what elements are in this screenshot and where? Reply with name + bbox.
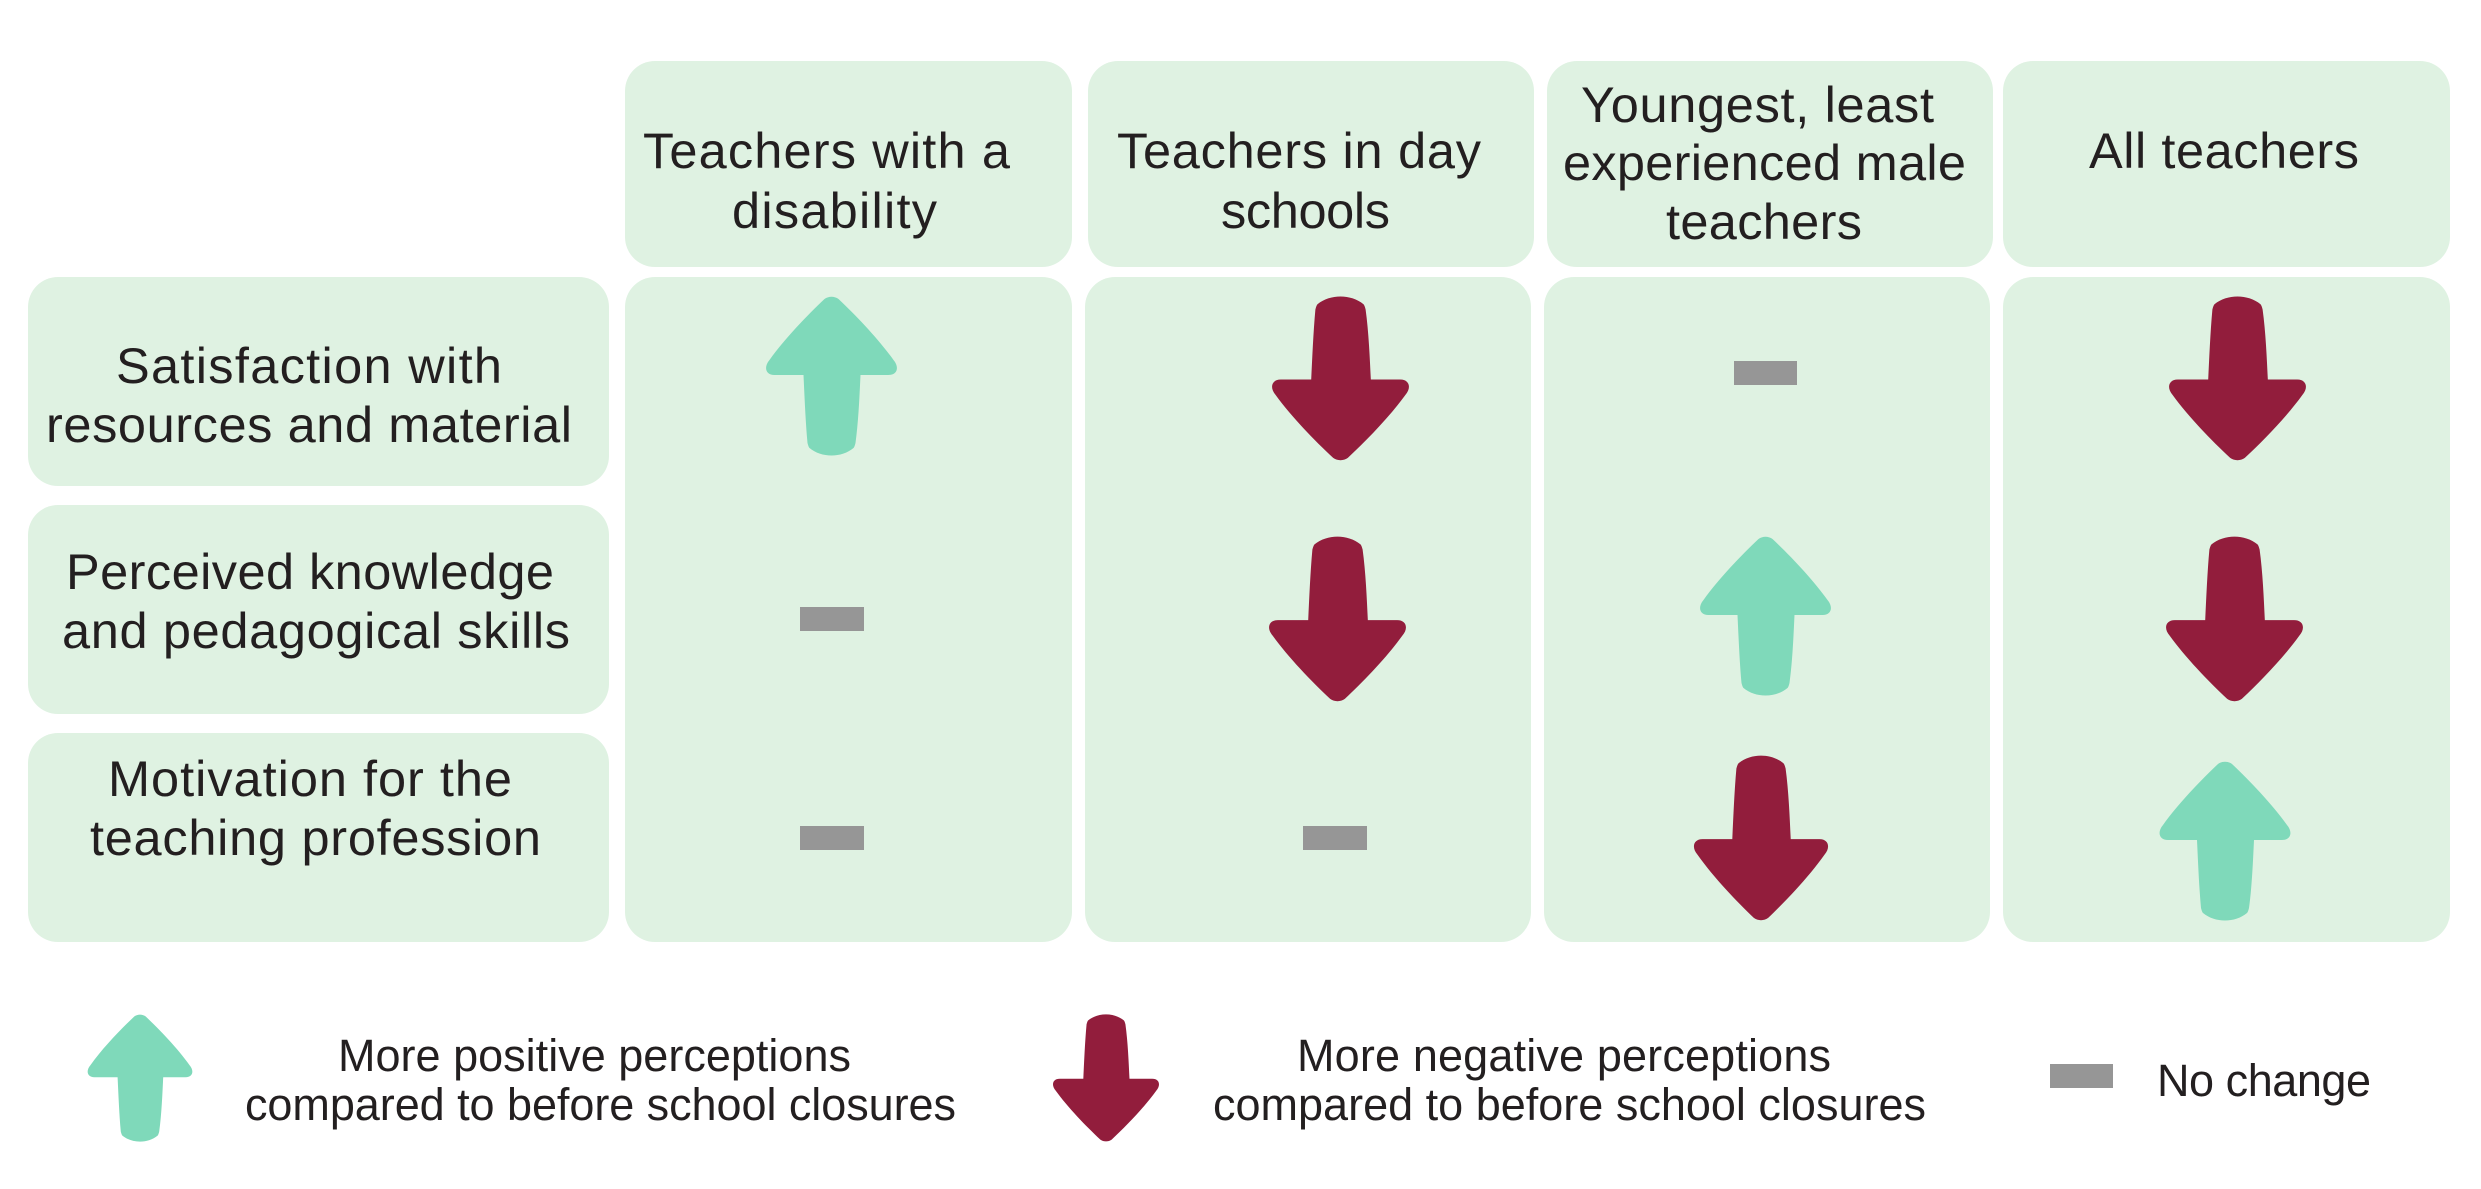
icon: up arrow, satisfaction [766, 297, 897, 456]
column header: teachers in day schools: Teachers in day [1117, 122, 1482, 179]
column header: youngest, least experienced male teachers [1547, 61, 1993, 267]
icon: no change dash, knowledge [800, 607, 864, 631]
icon: up arrow, knowledge [1700, 537, 1831, 696]
legend text: negative [1213, 1030, 1926, 1130]
icon: legend no change dash [2050, 1064, 2113, 1088]
legend text: positive: More positive perceptions [338, 1030, 851, 1081]
icon: down arrow, satisfaction [1272, 297, 1409, 460]
panel: teachers with a disability results [625, 277, 1072, 942]
icon: up arrow, motivation [2160, 762, 2290, 920]
column header: youngest, least experienced male teachers: Youngest, least [1581, 76, 1934, 133]
legend: more positive perceptions [88, 1015, 956, 1142]
column header: teachers in day schools [1088, 61, 1534, 267]
row label: perceived knowledge and pedagogical skills: and pedagogical skills [62, 602, 570, 659]
panel: teachers in day schools results [1085, 277, 1531, 942]
column header: teachers with a disability [625, 61, 1072, 267]
row label: satisfaction with resources and material: Satisfaction with [116, 337, 502, 394]
row label: motivation for the teaching profession: teaching profession [90, 809, 541, 866]
row label: satisfaction with resources and material [28, 277, 609, 486]
column header: all teachers: All teachers [2089, 122, 2359, 179]
legend text: no change: No change [2157, 1055, 2371, 1106]
row label: perceived knowledge and pedagogical skills [28, 505, 609, 714]
icon: down arrow, motivation [1694, 756, 1828, 920]
legend text: positive [245, 1030, 956, 1130]
legend: no change [2050, 1055, 2371, 1106]
panel: all teachers results [2003, 277, 2450, 942]
row label: motivation for the teaching profession: Motivation for the [108, 750, 512, 807]
legend text: negative: More negative perceptions [1297, 1030, 1831, 1081]
icon: legend down arrow [1053, 1014, 1159, 1141]
legend text: negative: compared to before school closures [1213, 1079, 1926, 1130]
icon: no change dash, motivation [800, 826, 864, 850]
legend: more negative perceptions [1053, 1014, 1926, 1141]
column header: youngest, least experienced male teachers: teachers [1666, 193, 1862, 250]
column header: teachers in day schools: schools [1221, 182, 1390, 239]
column header: teachers with a disability: Teachers with a [643, 122, 1011, 179]
icon: down arrow, satisfaction [2169, 297, 2306, 460]
icon: legend up arrow [88, 1015, 192, 1142]
row label: perceived knowledge and pedagogical skills: Perceived knowledge [66, 543, 554, 600]
column header: youngest, least experienced male teachers: experienced male [1563, 134, 1966, 191]
icon: down arrow, knowledge [2166, 537, 2303, 701]
column header: all teachers [2003, 61, 2450, 267]
icon: down arrow, knowledge [1269, 537, 1406, 701]
row label: satisfaction with resources and material: resources and material [46, 396, 572, 453]
icon: no change dash, motivation [1303, 826, 1367, 850]
icon: no change dash, satisfaction [1734, 361, 1797, 385]
legend text: positive: compared to before school closures [245, 1079, 956, 1130]
panel: youngest, least experienced male teachers results [1544, 277, 1990, 942]
column header: teachers with a disability: disability [732, 182, 938, 239]
row label: motivation for the teaching profession [28, 733, 609, 942]
